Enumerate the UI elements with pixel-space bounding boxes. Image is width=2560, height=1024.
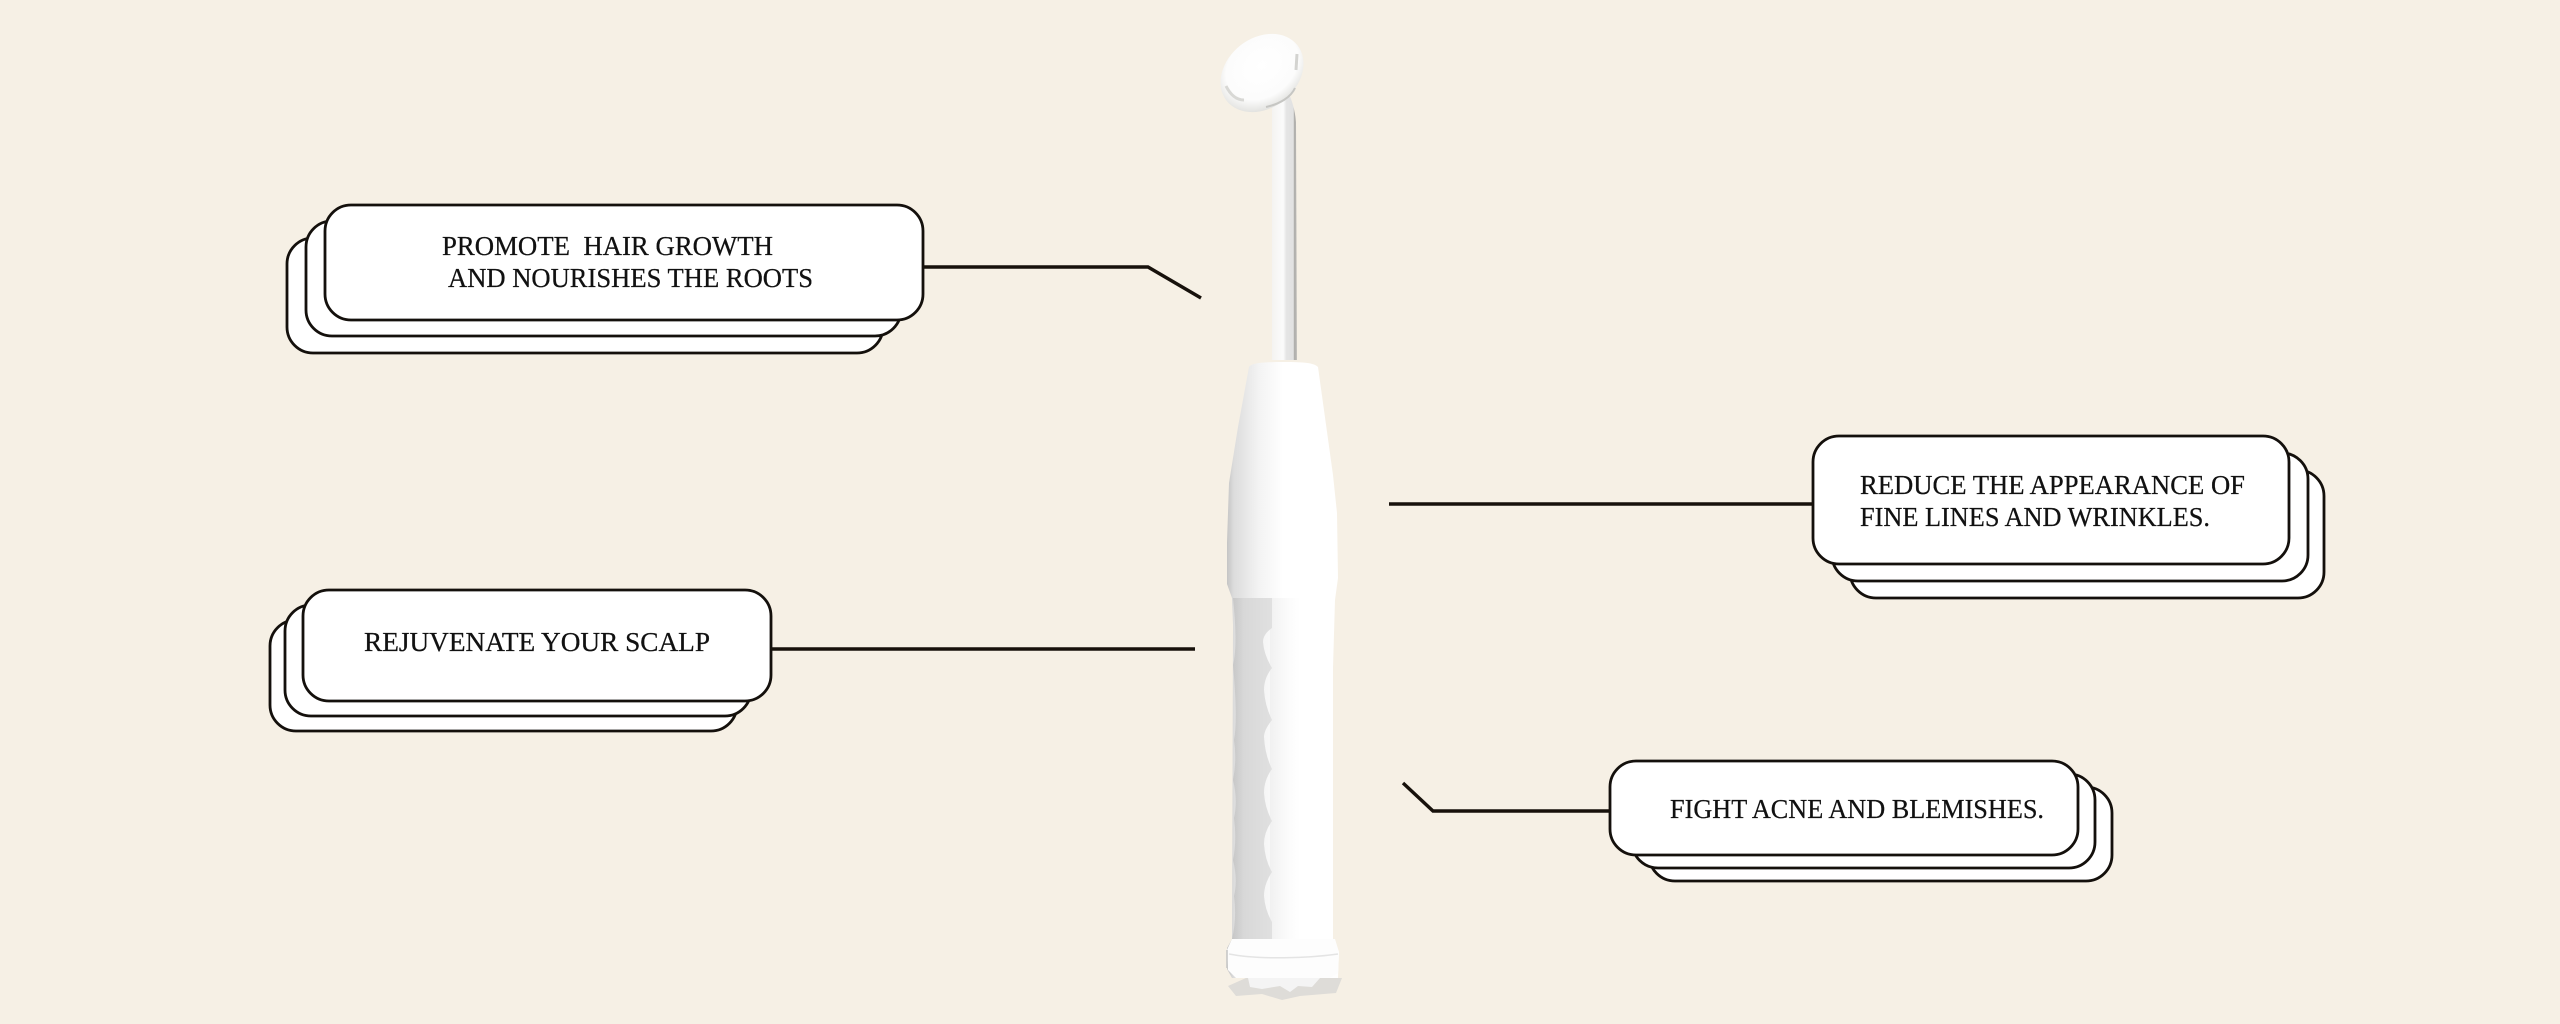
wand shadow at base <box>1228 978 1342 1000</box>
card stack <box>287 205 923 353</box>
wand mirror head <box>1205 18 1319 128</box>
wand glass tube <box>1272 92 1297 360</box>
callout text: REDUCE THE APPEARANCE OF <box>1860 470 2245 500</box>
callout text: AND NOURISHES THE ROOTS <box>448 263 813 293</box>
card stack <box>1813 436 2324 598</box>
card stack <box>1610 761 2112 881</box>
callout text: REJUVENATE YOUR SCALP <box>364 627 710 657</box>
wand grip textured band <box>1232 598 1272 939</box>
leader line <box>1403 783 1610 811</box>
wand grip soft zone <box>1270 598 1300 939</box>
callout: promote hair growth <box>287 205 1201 353</box>
wand handle upper body <box>1227 362 1339 978</box>
leader line <box>923 267 1201 298</box>
callout text: FIGHT ACNE AND BLEMISHES. <box>1670 794 2044 824</box>
callout text: PROMOTE HAIR GROWTH <box>442 231 773 261</box>
callout: reduce fine lines <box>1389 436 2324 598</box>
product: high-frequency wand device <box>1205 18 1342 1000</box>
leader line <box>1389 502 1813 506</box>
callout: rejuvenate your scalp <box>270 590 1195 731</box>
card stack <box>270 590 771 731</box>
wand feet <box>1248 978 1320 992</box>
callout text <box>442 231 813 293</box>
callout: fight acne <box>1403 761 2112 881</box>
callout text <box>1860 470 2245 532</box>
leader line <box>771 647 1195 651</box>
callout text: FINE LINES AND WRINKLES. <box>1860 502 2210 532</box>
wand base collar <box>1227 939 1339 978</box>
